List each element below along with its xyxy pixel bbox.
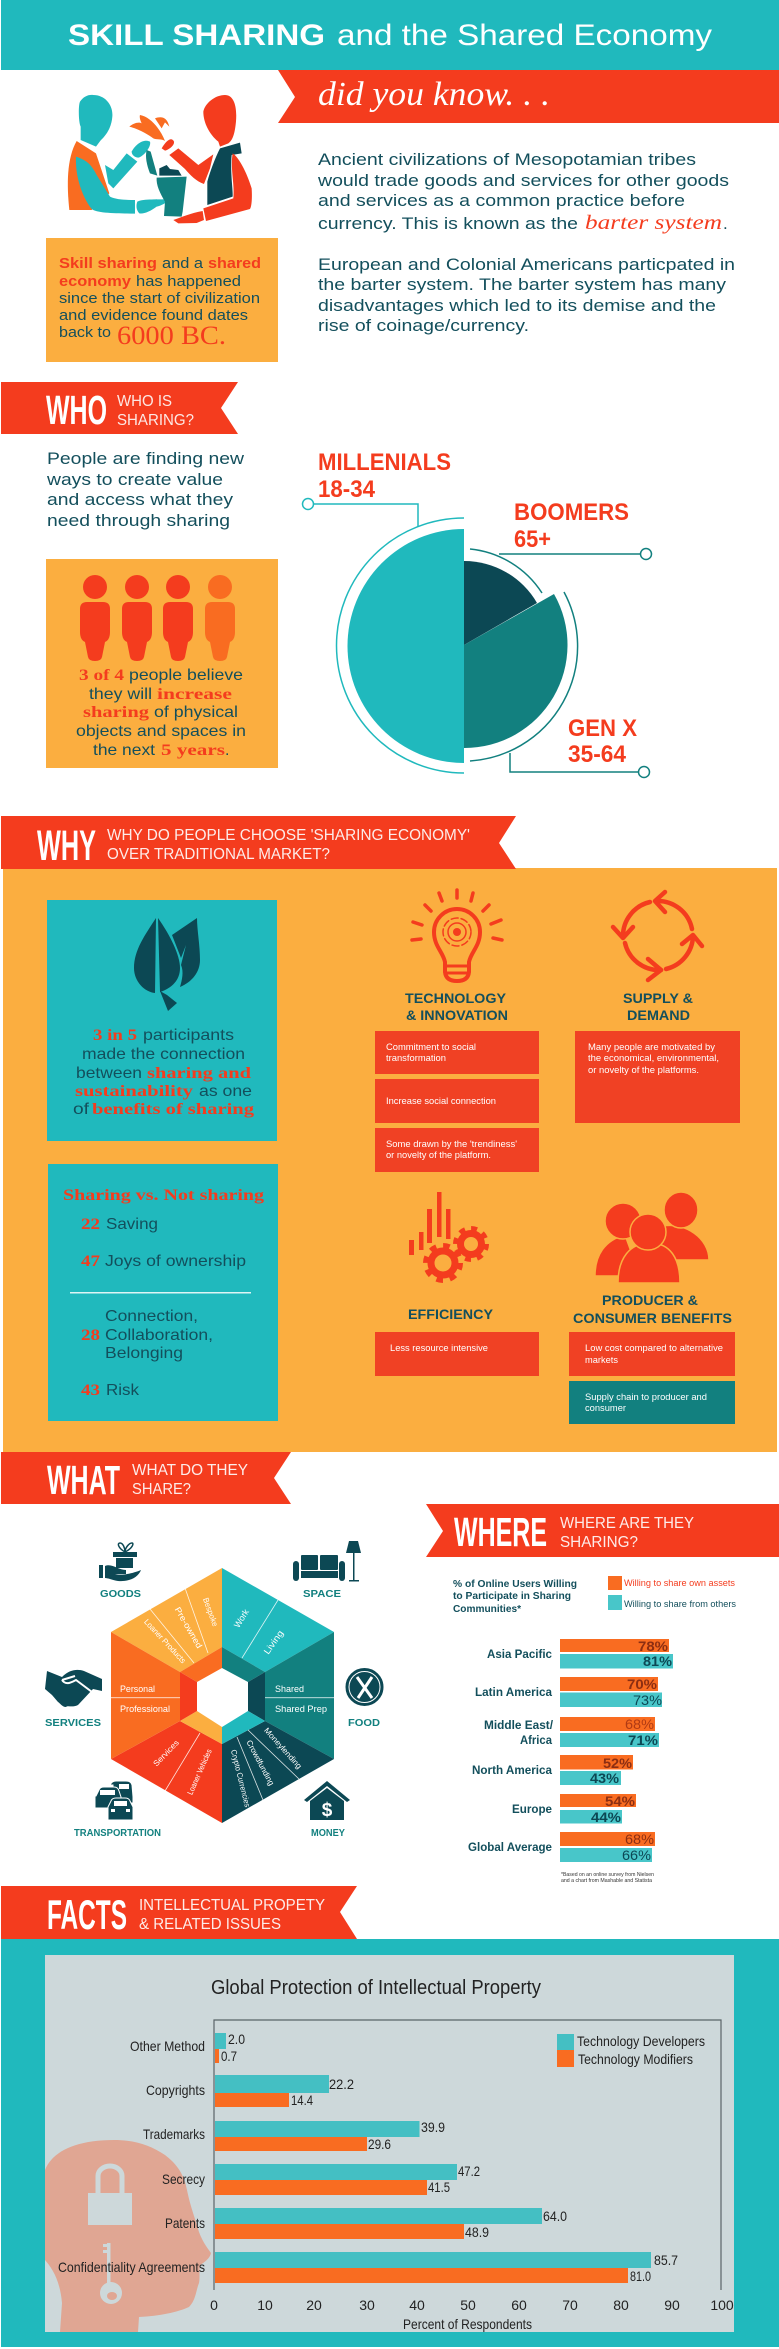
row: patents: Patents bbox=[165, 2215, 205, 2231]
text: barter system: European and Colonial Americans particpated in bbox=[318, 255, 735, 274]
callout: 3 of 4 people: objects and spaces in bbox=[76, 723, 246, 740]
x axis title: Percent of Respondents bbox=[403, 2316, 532, 2332]
row: asia pacific: 81% bbox=[643, 1653, 673, 1669]
callout: 3 of 4 people: 5 years bbox=[161, 742, 225, 759]
section heading: where: WHERE ARE THEY bbox=[560, 1515, 694, 1532]
callout: 3 of 4 people: they will bbox=[89, 686, 152, 703]
block: supply and demand: the economical, environmental, bbox=[588, 1053, 719, 1064]
row: confidentiality agreements: Confidentiality Agreements bbox=[58, 2259, 205, 2275]
block: technology and innovation: & INNOVATION bbox=[406, 1007, 508, 1023]
block: producer and consumer benefits bbox=[569, 1192, 735, 1424]
row: north america: North America bbox=[472, 1765, 553, 1777]
icon group: goods bbox=[99, 1543, 141, 1600]
slice: millenials bbox=[348, 529, 464, 763]
illustration: two people bartering bbox=[68, 95, 252, 223]
label: gen x: GEN X bbox=[568, 715, 637, 742]
label: boomers bbox=[514, 499, 629, 553]
block: supply and demand: DEMAND bbox=[627, 1007, 690, 1023]
callout: 6000 BC: has happened bbox=[136, 273, 241, 290]
row: latin america: 73% bbox=[633, 1692, 662, 1708]
block: efficiency: Less resource intensive bbox=[390, 1343, 488, 1354]
label: boomers: 65+ bbox=[514, 526, 551, 553]
sector: goods: Bespoke bbox=[201, 1597, 220, 1628]
block: producer and consumer benefits: CONSUMER BENEFITS bbox=[573, 1310, 732, 1326]
callout: 6000 BC: economy bbox=[59, 273, 132, 290]
text: barter system: currency. This is known as the bbox=[318, 214, 578, 233]
section heading: why bbox=[1, 816, 516, 870]
row: other method: 2.0 bbox=[228, 2031, 245, 2047]
row: europe: 54% bbox=[605, 1793, 636, 1809]
panel: sharing vs not sharing: Collaboration, bbox=[105, 1327, 213, 1344]
x axis labels: 10 bbox=[257, 2297, 273, 2313]
block: producer and consumer benefits: PRODUCER & bbox=[602, 1292, 698, 1308]
row: europe: Europe bbox=[512, 1804, 552, 1816]
row: latin america bbox=[475, 1676, 662, 1708]
footnote: and a chart from Mashable and Statista bbox=[561, 1878, 653, 1884]
section heading: where: SHARING? bbox=[560, 1534, 638, 1551]
legend: Technology Developers bbox=[577, 2033, 705, 2049]
callout: 6000 BC: since the start of civilization bbox=[59, 290, 260, 307]
sector: services bbox=[111, 1632, 197, 1759]
panel: sustainability: made the connection bbox=[82, 1046, 245, 1063]
panel: sharing vs not sharing: Belonging bbox=[105, 1345, 183, 1362]
row: copyrights: 14.4 bbox=[291, 2092, 313, 2108]
block: efficiency: EFFICIENCY bbox=[408, 1306, 494, 1322]
did you know ribbon: did you know. . . bbox=[318, 76, 550, 113]
icon: light bulb bbox=[412, 890, 502, 981]
block: efficiency bbox=[375, 1192, 539, 1376]
slice: boomers bbox=[464, 561, 537, 645]
x axis labels: 90 bbox=[664, 2297, 680, 2313]
callout: 6000 BC: back to bbox=[59, 324, 111, 341]
sector: goods bbox=[111, 1568, 222, 1682]
row: asia pacific: 78% bbox=[638, 1638, 669, 1654]
section heading: what: SHARE? bbox=[132, 1481, 191, 1498]
title banner bbox=[1, 0, 779, 70]
label: gen x: 35-64 bbox=[568, 741, 627, 768]
section heading: why: WHY DO PEOPLE CHOOSE 'SHARING ECONOMY' bbox=[107, 827, 470, 844]
sector: food: Shared bbox=[275, 1684, 304, 1695]
section heading: why: WHY bbox=[37, 822, 96, 870]
sector: money: Moneylending bbox=[262, 1726, 304, 1771]
x axis labels: 20 bbox=[306, 2297, 322, 2313]
block: technology and innovation: or novelty of the platform. bbox=[386, 1150, 491, 1161]
hexagon chart: what is shared bbox=[111, 1568, 334, 1823]
icon group: space: SPACE bbox=[303, 1588, 341, 1600]
icon group: goods: GOODS bbox=[100, 1588, 141, 1600]
sector: transportation bbox=[111, 1711, 222, 1823]
icon group: money bbox=[304, 1781, 350, 1839]
row: middle east africa bbox=[484, 1716, 659, 1748]
section heading: where: WHERE bbox=[454, 1509, 547, 1555]
sector: space bbox=[222, 1568, 334, 1682]
block: supply and demand: or novelty of the platforms. bbox=[588, 1065, 699, 1076]
block: producer and consumer benefits: consumer bbox=[585, 1403, 626, 1414]
icon: four people bbox=[80, 575, 235, 661]
panel: facts background bbox=[1, 1939, 779, 2347]
sector: space: Living bbox=[262, 1628, 285, 1656]
label: millenials: 18-34 bbox=[318, 476, 376, 503]
icon group: space bbox=[293, 1541, 361, 1600]
row: patents: 64.0 bbox=[543, 2208, 567, 2224]
panel: sharing vs not sharing: Sharing vs. Not sharing bbox=[63, 1187, 264, 1204]
row: middle east africa: Africa bbox=[520, 1735, 553, 1747]
callout: 6000 BC: and evidence found dates bbox=[59, 307, 248, 324]
panel: sustainability: of bbox=[73, 1101, 90, 1118]
x axis labels: 50 bbox=[460, 2297, 476, 2313]
row: confidentiality agreements: 85.7 bbox=[654, 2252, 678, 2268]
callout: 6000 BC: 6000 BC. bbox=[117, 321, 226, 350]
sector: food: Shared Prep bbox=[275, 1704, 327, 1715]
section heading: who: WHO bbox=[46, 387, 107, 433]
x axis labels: 60 bbox=[511, 2297, 527, 2313]
row: confidentiality agreements: 81.0 bbox=[630, 2268, 651, 2284]
x axis labels bbox=[210, 2297, 734, 2313]
callout: 3 of 4 people: sharing bbox=[83, 704, 149, 721]
callout: 6000 BC: shared bbox=[208, 255, 261, 272]
did you know ribbon bbox=[278, 70, 779, 123]
sector: services: Personal bbox=[120, 1684, 155, 1695]
slice: gen x bbox=[464, 594, 568, 748]
sector: money: Crypto Currencies bbox=[229, 1749, 252, 1808]
callout: 3 of 4 people: increase bbox=[157, 686, 232, 703]
row: confidentiality agreements bbox=[58, 2252, 678, 2284]
x axis labels: 30 bbox=[359, 2297, 375, 2313]
row: copyrights: Copyrights bbox=[146, 2082, 205, 2098]
row: other method: 0.7 bbox=[221, 2048, 237, 2064]
row: secrecy: 47.2 bbox=[458, 2163, 480, 2179]
panel: sharing vs not sharing: Connection, bbox=[105, 1308, 198, 1325]
panel: sharing vs not sharing: Risk bbox=[106, 1382, 140, 1399]
callout: 3 of 4 people: people believe bbox=[129, 667, 243, 684]
row: latin america: 70% bbox=[627, 1676, 658, 1692]
row: north america bbox=[472, 1755, 633, 1786]
icon group: services bbox=[45, 1670, 102, 1729]
callout: 6000 BC: Skill sharing bbox=[59, 255, 157, 272]
block: technology and innovation: Some drawn by the 'trendiness' bbox=[386, 1139, 517, 1150]
legend: Technology Modifiers bbox=[578, 2051, 693, 2067]
panel: sustainability: sharing and bbox=[147, 1065, 251, 1082]
text: barter system: rise of coinage/currency. bbox=[318, 316, 529, 335]
pie chart: generations bbox=[302, 498, 652, 778]
panel: why background bbox=[3, 868, 777, 1452]
row: asia pacific: Asia Pacific bbox=[487, 1649, 553, 1661]
sector: money: Crowdfunding bbox=[244, 1739, 276, 1787]
panel: sharing vs not sharing: Saving bbox=[106, 1216, 158, 1233]
panel: sharing vs not sharing: 43 bbox=[81, 1382, 100, 1399]
block: producer and consumer benefits: Supply chain to producer and bbox=[585, 1392, 707, 1403]
section heading: where bbox=[426, 1504, 779, 1557]
icon group: services: SERVICES bbox=[45, 1717, 101, 1729]
row: trademarks: Trademarks bbox=[143, 2126, 205, 2142]
row: north america: 43% bbox=[590, 1770, 620, 1786]
icon: three people bbox=[595, 1192, 709, 1283]
icon group: food bbox=[346, 1669, 382, 1729]
callout: 3 of 4 people: the next bbox=[93, 742, 156, 759]
callout: 3 of 4 people: . bbox=[225, 742, 229, 759]
sector: money bbox=[222, 1711, 334, 1823]
block: technology and innovation bbox=[375, 890, 539, 1172]
x axis labels: 80 bbox=[613, 2297, 629, 2313]
panel: sustainability: 3 in 5 bbox=[93, 1027, 137, 1044]
label: millenials: MILLENIALS bbox=[318, 449, 451, 476]
row: secrecy: 41.5 bbox=[428, 2179, 450, 2195]
icon: bars and gears bbox=[409, 1192, 486, 1280]
legend: Willing to share from others bbox=[624, 1599, 737, 1609]
chart heading: to Participate in Sharing bbox=[453, 1590, 571, 1602]
text: people finding new ways: and access what they bbox=[47, 490, 234, 509]
row: secrecy bbox=[162, 2163, 480, 2195]
row: europe bbox=[512, 1793, 636, 1825]
row: global average: 68% bbox=[625, 1831, 654, 1847]
row: patents: 48.9 bbox=[465, 2224, 489, 2240]
callout: 6000 BC: and a bbox=[162, 255, 204, 272]
icon group: transportation bbox=[74, 1781, 161, 1839]
block: technology and innovation: transformation bbox=[386, 1053, 446, 1064]
callout: 3 of 4 people bbox=[46, 559, 278, 768]
block: technology and innovation: Commitment to social bbox=[386, 1042, 476, 1053]
section heading: what bbox=[1, 1452, 291, 1504]
block: technology and innovation: Increase social connection bbox=[386, 1096, 496, 1107]
panel: sustainability bbox=[47, 900, 277, 1141]
row: trademarks bbox=[143, 2119, 445, 2152]
x axis labels: 100 bbox=[710, 2297, 734, 2313]
icon group: money: $ bbox=[322, 1800, 333, 1821]
section heading: facts: INTELLECTUAL PROPETY bbox=[139, 1897, 325, 1914]
label: gen x bbox=[568, 715, 637, 768]
row: middle east africa: 68% bbox=[625, 1716, 654, 1732]
x axis labels: 70 bbox=[562, 2297, 578, 2313]
row: patents bbox=[165, 2208, 567, 2240]
block: producer and consumer benefits: Low cost compared to alternative bbox=[585, 1343, 723, 1354]
callout: 6000 BC bbox=[46, 238, 278, 362]
row: latin america: Latin America bbox=[475, 1687, 553, 1699]
row: asia pacific bbox=[487, 1638, 673, 1669]
row: other method: Other Method bbox=[130, 2038, 205, 2054]
icon group: food: FOOD bbox=[348, 1717, 380, 1729]
row: middle east africa: 71% bbox=[628, 1732, 659, 1748]
chart heading bbox=[453, 1578, 577, 1615]
section heading: facts: & RELATED ISSUES bbox=[139, 1916, 281, 1933]
callout: 3 of 4 people: 3 of 4 bbox=[79, 667, 124, 684]
footnote: *Based on an online survey from Nielsen bbox=[561, 1872, 654, 1878]
text: people finding new ways: ways to create value bbox=[46, 470, 223, 489]
block: supply and demand: SUPPLY & bbox=[623, 990, 693, 1006]
icon group: money: MONEY bbox=[311, 1827, 345, 1839]
text: people finding new ways: People are finding new bbox=[47, 449, 245, 468]
block: producer and consumer benefits: markets bbox=[585, 1355, 618, 1366]
sector: space: Work bbox=[232, 1607, 251, 1630]
chart frame bbox=[214, 2020, 721, 2290]
text: people finding new ways bbox=[46, 449, 245, 530]
block: technology and innovation: TECHNOLOGY bbox=[405, 990, 507, 1006]
icon: leaves bbox=[134, 918, 200, 1011]
row: global average bbox=[468, 1831, 655, 1863]
label: millenials bbox=[318, 449, 451, 503]
row: global average: Global Average bbox=[468, 1842, 552, 1854]
icon group: transportation: TRANSPORTATION bbox=[74, 1827, 161, 1839]
panel: sustainability: between bbox=[76, 1065, 142, 1082]
panel: intellectual property chart bbox=[45, 1955, 734, 2332]
panel: sustainability: sustainability bbox=[75, 1083, 193, 1100]
x axis labels: 40 bbox=[409, 2297, 425, 2313]
panel: sustainability: benefits of sharing bbox=[92, 1101, 254, 1118]
text: barter system bbox=[317, 150, 735, 335]
chart heading: Communities* bbox=[453, 1603, 522, 1615]
row: trademarks: 29.6 bbox=[368, 2136, 391, 2152]
bar chart: where bbox=[453, 1576, 737, 1884]
row: europe: 44% bbox=[591, 1809, 622, 1825]
footnote bbox=[561, 1872, 654, 1884]
panel: sharing vs not sharing bbox=[48, 1164, 278, 1421]
label: boomers: BOOMERS bbox=[514, 499, 629, 526]
legend: Willing to share own assets bbox=[624, 1578, 736, 1588]
section heading: what: WHAT DO THEY bbox=[132, 1462, 248, 1479]
row: copyrights bbox=[146, 2075, 354, 2108]
sector: transportation: Services bbox=[152, 1738, 181, 1768]
row: trademarks: 39.9 bbox=[421, 2119, 445, 2135]
panel: sharing vs not sharing: Joys of ownership bbox=[105, 1253, 246, 1270]
text: barter system: Ancient civilizations of Mesopotamian tribes bbox=[318, 150, 696, 169]
title banner: SKILL SHARING bbox=[68, 19, 325, 52]
row: middle east africa: Middle East/ bbox=[484, 1720, 554, 1732]
panel: sustainability: as one bbox=[199, 1083, 252, 1100]
sector: food bbox=[248, 1632, 334, 1759]
text: barter system: barter system bbox=[585, 212, 722, 234]
section heading: who: SHARING? bbox=[117, 412, 194, 429]
illustration: head with lock and key bbox=[45, 2140, 211, 2332]
chart heading: % of Online Users Willing bbox=[453, 1578, 577, 1590]
panel: sustainability: participants bbox=[143, 1027, 234, 1044]
panel: sharing vs not sharing: 28 bbox=[81, 1327, 100, 1344]
sector: transportation: Loaner Vehicles bbox=[186, 1748, 214, 1796]
text: barter system: and services as a common practice before bbox=[318, 191, 685, 210]
x axis labels: 0 bbox=[210, 2297, 218, 2313]
row: secrecy: Secrecy bbox=[162, 2171, 205, 2187]
sector: services: Professional bbox=[120, 1704, 170, 1715]
text: barter system: disadvantages which led to its demise and the bbox=[318, 296, 716, 315]
row: copyrights: 22.2 bbox=[329, 2076, 354, 2092]
section heading: who bbox=[1, 382, 238, 434]
text: people finding new ways: need through sharing bbox=[47, 511, 230, 530]
panel: sharing vs not sharing: 47 bbox=[81, 1253, 100, 1270]
section heading: facts bbox=[1, 1886, 357, 1939]
row: global average: 66% bbox=[622, 1847, 651, 1863]
text: barter system: would trade goods and services for other goods bbox=[317, 171, 729, 190]
callout: 3 of 4 people: of physical bbox=[154, 704, 238, 721]
legend bbox=[557, 2033, 705, 2067]
section heading: what: WHAT bbox=[47, 1457, 120, 1503]
block: supply and demand: Many people are motivated by bbox=[588, 1042, 715, 1053]
legend bbox=[608, 1576, 737, 1610]
sector: goods: Pre-owned bbox=[173, 1605, 205, 1650]
text: barter system: . bbox=[723, 214, 728, 233]
section heading: why: OVER TRADITIONAL MARKET? bbox=[107, 846, 330, 863]
section heading: facts: FACTS bbox=[47, 1891, 127, 1938]
panel: sharing vs not sharing: 22 bbox=[81, 1216, 100, 1233]
icon: cycle arrows bbox=[613, 892, 702, 980]
title banner: and the Shared Economy bbox=[337, 19, 712, 52]
block: supply and demand bbox=[575, 892, 740, 1123]
sector: goods: Loaner Products bbox=[142, 1617, 188, 1665]
row: north america: 52% bbox=[603, 1755, 633, 1771]
chart title: Global Protection of Intellectual Property bbox=[211, 1977, 541, 1999]
text: barter system: the barter system. The barter system has many bbox=[318, 275, 727, 294]
row: other method bbox=[130, 2031, 245, 2064]
section heading: who: WHO IS bbox=[117, 393, 172, 410]
